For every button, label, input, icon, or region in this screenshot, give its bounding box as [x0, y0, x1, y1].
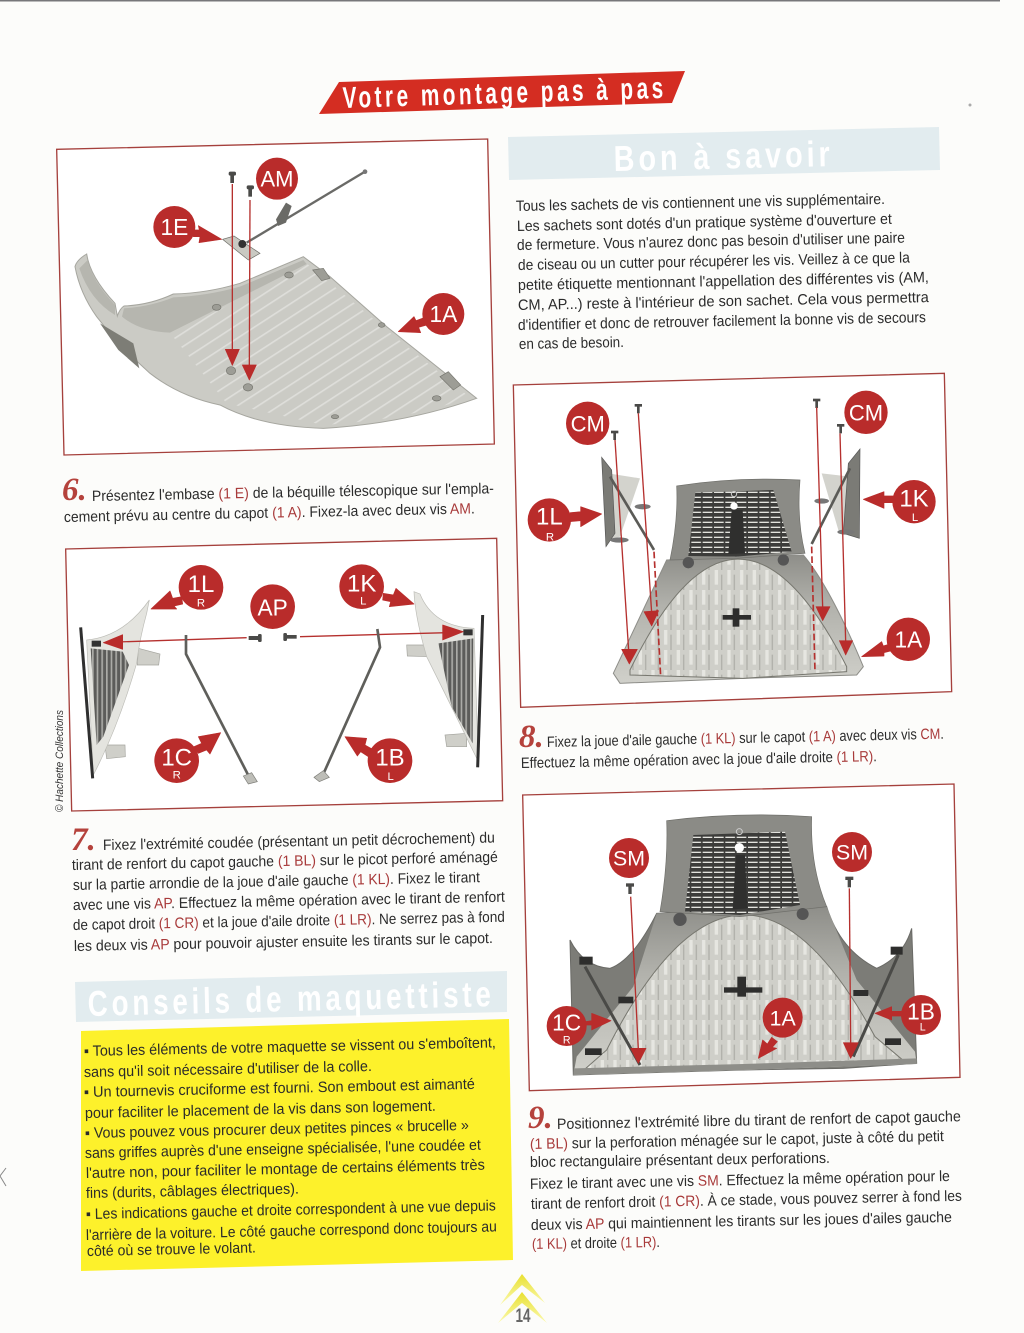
- callout: 1A: 1A: [429, 301, 458, 327]
- text block: Bon à savoir: petite étiquette mentionnant l'appellation des différentes vis (AM,: [518, 269, 929, 294]
- callout: 1A: [862, 618, 930, 661]
- callout: 1L: 1L: [188, 571, 214, 598]
- callout: 1K: [339, 564, 414, 609]
- capot central slope: [573, 907, 917, 1075]
- step 7 text: Fixez l'extrémité coudée (présentant un petit décrochement) du: [103, 829, 495, 854]
- left cheek 1L: [602, 457, 654, 550]
- title banner: Votre montage pas à pas: [342, 72, 667, 115]
- tie rods 1C and 1B: [585, 955, 898, 1065]
- panel: yellow tips box: pour faciliter le placement de la vis dans son logement.: [85, 1098, 436, 1122]
- callout: 1B: L: [388, 771, 394, 783]
- callout: CM right: CM: [849, 400, 883, 425]
- callout: 1K: 1K: [899, 485, 929, 512]
- step 6 text: cement prévu au centre du capot (1 A). Fixez-la avec deux vis AM.: [64, 500, 475, 526]
- panel: yellow tips box: ▪ Vous pouvez vous procurer deux petites pinces « brucelle »: [85, 1117, 469, 1142]
- text block: Bon à savoir: CM, AP...) reste à l'intérieur de son sachet. Cela vous permettra: [518, 289, 930, 314]
- heading: Bon à savoir: Bon à savoir: [613, 133, 834, 179]
- capot upper hood: [670, 479, 805, 560]
- step 9 text: deux vis AP qui maintiennent les tirants sur les joues d'ailes gauche: [531, 1209, 952, 1234]
- dashed guides: [654, 547, 815, 677]
- callout: 1E: 1E: [160, 214, 188, 240]
- step 7 text: tirant de renfort du capot gauche (1 BL) sur le picot perforé aménagé: [72, 849, 498, 874]
- callout: 1C: R: [173, 769, 181, 781]
- panel: yellow tips box: sans qu'il soit nécessaire d'utiliser de la colle.: [84, 1058, 372, 1081]
- panel: step 8 illustration: [513, 373, 952, 707]
- copyright credit: © Hachette Collections: [54, 710, 66, 812]
- step 7 text: 7.: [71, 822, 96, 858]
- panel: yellow tips box: sans griffes auprès d'une enseigne spécialisée, l'une coudée et: [85, 1137, 482, 1162]
- right wing cheek: [407, 592, 483, 767]
- callout: 1A: 1A: [894, 626, 923, 652]
- panel: yellow tips box: l'autre non, pour faciliter le montage de certains éléments très: [86, 1157, 485, 1182]
- capot lower body: [613, 555, 863, 683]
- callout: SM left: SM: [613, 847, 645, 871]
- callout: AP: [250, 584, 295, 629]
- step 6 text: Présentez l'embase (1 E) de la béquille télescopique sur l'empla-: [92, 480, 494, 505]
- heading: Conseils de maquettiste: Conseils de maquettiste: [87, 973, 495, 1024]
- callout: 1C: 1C: [552, 1010, 581, 1036]
- step 7 text: avec une vis AP. Effectuez la même opération avec le tirant de renfort: [73, 889, 506, 914]
- callout: 1B: L: [920, 1022, 926, 1034]
- fixing pegs: [212, 268, 461, 419]
- capot lower body with wings: [570, 907, 917, 1075]
- panel: step 7 illustration: [66, 538, 503, 811]
- radiator grille: [673, 829, 809, 926]
- arrow: right AP axis: [300, 625, 463, 640]
- step 9 text: 9.: [528, 1100, 553, 1136]
- left tie rod 1C: [186, 635, 257, 784]
- step 8 text: Effectuez la même opération avec la joue d'aile droite (1 LR).: [521, 748, 877, 772]
- step 6 text: 6.: [62, 472, 87, 508]
- text block: Bon à savoir: Tous les sachets de vis contiennent une vis supplémentaire.: [516, 191, 885, 215]
- callout: 1L: R: [197, 598, 205, 610]
- text block: Bon à savoir: de ciseau ou un cutter pour récupérer les vis. Veillez à ce que la: [518, 249, 911, 274]
- callout: 1A: [398, 293, 464, 335]
- step 8 text: 8.: [519, 719, 544, 755]
- screws: [229, 172, 254, 197]
- callout: 1B: 1B: [375, 744, 405, 771]
- capot ribs: [172, 263, 470, 425]
- panel: step 9 illustration: [523, 784, 960, 1091]
- step 8 text: Fixez la joue d'aile gauche (1 KL) sur le capot (1 A) avec deux vis CM.: [547, 726, 944, 751]
- step 9 text: (1 BL) sur la perforation ménagée sur le capot, juste à côté du petit: [530, 1128, 945, 1153]
- callout: 1K: [863, 480, 936, 524]
- callout: 1C: [547, 1006, 611, 1046]
- callout: 1L: 1L: [536, 504, 563, 531]
- page specks: [0, 104, 972, 1186]
- panel: yellow tips box: fins (durits, câblages électriques).: [86, 1181, 299, 1202]
- callout: AP: AP: [258, 594, 288, 620]
- page number with chevrons: 14: [516, 1306, 531, 1327]
- arrow: right SM axis: [843, 888, 858, 1058]
- capot ribbed centre: [582, 915, 907, 1072]
- callout: AM: [256, 158, 298, 200]
- title banner: [319, 71, 685, 115]
- callout: 1A: 1A: [770, 1006, 796, 1030]
- callout: 1E: [153, 206, 222, 248]
- page number with chevrons: [498, 1274, 547, 1327]
- step 7 text: sur la partie arrondie de la joue d'aile gauche (1 KL). Fixez le tirant: [73, 869, 481, 894]
- callout: 1K: 1K: [347, 570, 376, 597]
- capot body: [75, 254, 477, 428]
- dark mounts: [585, 990, 901, 1055]
- heading: Bon à savoir: [508, 127, 940, 180]
- arrow: right screw: [242, 200, 256, 380]
- callout: 1L: [528, 498, 602, 544]
- radiator grille: [683, 490, 792, 568]
- callout: AM: AM: [261, 167, 293, 192]
- callout: 1B: [875, 995, 941, 1035]
- step 9 text: Positionnez l'extrémité libre du tirant de renfort de capot gauche: [557, 1108, 961, 1133]
- arrow: left screw: [225, 184, 239, 365]
- callout: CM left: [566, 402, 609, 445]
- screws AP: [249, 633, 297, 642]
- step 7 text: les deux vis AP pour pouvoir ajuster ensuite les tirants sur le capot.: [74, 930, 493, 955]
- inner flap: [79, 260, 307, 333]
- panel: yellow tips box: ▪ Un tournevis cruciforme est fourni. Son embout est aimanté: [84, 1076, 475, 1101]
- callout: CM right: [844, 391, 888, 434]
- step 9 text: bloc rectangulaire présentant deux perforations.: [530, 1150, 830, 1171]
- arrow: left SM axis: [631, 897, 646, 1063]
- capot ribbed centre: [630, 559, 847, 678]
- screws SM: [626, 877, 853, 894]
- right cheek 1K: [812, 449, 860, 544]
- callout: 1C: [154, 733, 221, 783]
- panel: yellow tips box: [81, 1019, 513, 1271]
- step 9 text: (1 KL) et droite (1 LR).: [532, 1234, 660, 1253]
- callout: 1K: L: [912, 512, 918, 524]
- capot upper hood: [660, 815, 827, 917]
- central bracket: [724, 977, 762, 997]
- callout: SM right: [832, 832, 872, 872]
- side grille: [100, 323, 139, 368]
- text block: Bon à savoir: Les sachets sont dotés d'un pratique système d'ouverture et: [517, 211, 893, 235]
- callout: 1A: [758, 998, 803, 1058]
- left wing cheek: [81, 600, 160, 778]
- callout: 1L: [151, 565, 223, 610]
- panel: yellow tips box: ▪ Les indications gauche et droite correspondent à une vue depuis: [86, 1197, 496, 1223]
- capot base strip: [573, 1058, 917, 1075]
- central bracket: [723, 608, 751, 627]
- panel: step 6 illustration: [57, 139, 494, 455]
- step 9 text: [528, 1100, 962, 1253]
- text block: Bon à savoir: en cas de besoin.: [519, 334, 624, 353]
- callout: 1B: 1B: [907, 999, 935, 1025]
- text block: Bon à savoir: [516, 191, 930, 353]
- step 7 text: de capot droit (1 CR) et la joue d'aile droite (1 LR). Ne serrez pas à fond: [73, 909, 505, 934]
- screws CM: [611, 399, 844, 440]
- step 8 text: [519, 719, 944, 772]
- callout: 1C: R: [563, 1034, 571, 1046]
- step 9 text: tirant de renfort droit (1 CR). À ce stade, vous pouvez serrer à fond les: [531, 1188, 962, 1213]
- page top edge: [0, 0, 1000, 2]
- panel: yellow tips box: l'arrière de la voiture. Le côté gauche correspond donc toujours au: [86, 1218, 497, 1244]
- arrows: CM screw axes: [615, 407, 853, 664]
- callout: 1C: 1C: [161, 744, 192, 771]
- step 7 text: [71, 822, 506, 955]
- arrow: left AP axis: [103, 635, 247, 649]
- callout: 1B: [345, 737, 412, 783]
- callout: SM left: [609, 838, 649, 878]
- text block: Bon à savoir: de fermeture. Vous n'aurez donc pas besoin d'utiliser une paire: [517, 230, 905, 254]
- step 6 text: [62, 472, 494, 526]
- bracket and telescopic strut: [223, 169, 367, 260]
- callout: 1K: L: [360, 596, 366, 608]
- callout: 1L: R: [546, 532, 554, 544]
- right tie rod 1B: [314, 629, 380, 782]
- text block: Bon à savoir: d'identifier et donc de retrouver facilement la bonne vis de secours: [518, 309, 926, 334]
- panel: yellow tips box: ▪ Tous les éléments de votre maquette se vissent ou s'emboîtent,: [84, 1034, 496, 1060]
- step 9 text: Fixez le tirant avec une vis SM. Effectuez la même opération pour le: [530, 1168, 950, 1193]
- panel: yellow tips box: côté où se trouve le volant.: [87, 1239, 256, 1260]
- callout: CM left: CM: [571, 411, 605, 436]
- callout: SM right: SM: [836, 841, 868, 865]
